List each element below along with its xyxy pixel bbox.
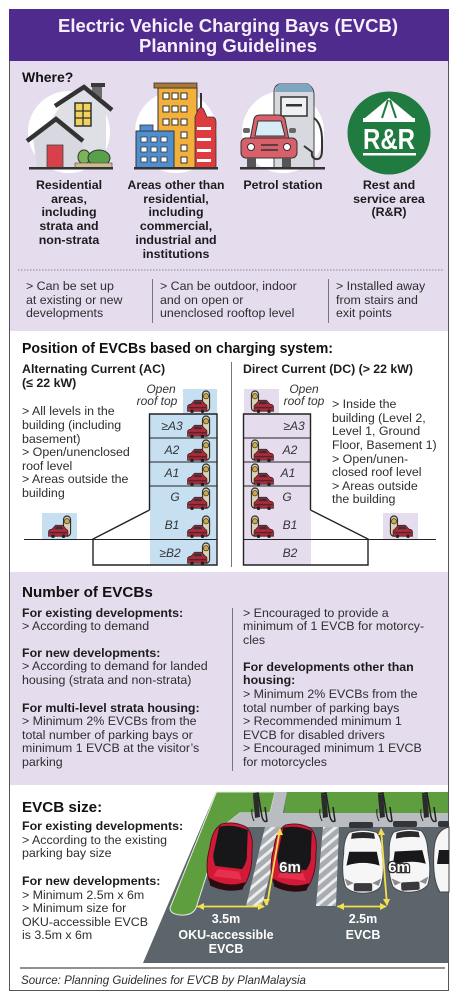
- title: [9, 9, 449, 61]
- text: left column: total number of parking bays or: [22, 728, 193, 742]
- icon: white car two: [387, 828, 431, 893]
- text: AC description: building: [22, 486, 65, 500]
- text: EVCB size notes: > Minimum 2.5m x 6m: [22, 888, 144, 902]
- text: AC description: basement): [22, 432, 81, 446]
- label: OKU-accessible size: 3.5m: [212, 912, 240, 926]
- text: AC description: > All levels in the: [22, 404, 115, 418]
- text: left column: minimum 1 EVCB at the visitor’s: [22, 741, 199, 755]
- icon: petrol station: [240, 84, 325, 173]
- heading: number of EVCBs: Number of EVCBs: [22, 584, 153, 601]
- diagram: AC building: B1: [165, 518, 179, 532]
- text: EVCB size notes: OKU-accessible EVCB: [22, 915, 148, 929]
- label: 6m EVCB: 6m: [388, 859, 410, 876]
- diagram: DC building: A2: [282, 443, 298, 457]
- text: location labels: Residential: [36, 178, 102, 192]
- text: DC description: > Inside the: [332, 397, 397, 411]
- text: DC description: [332, 397, 437, 506]
- diagram: AC building: G: [170, 490, 180, 504]
- text: left column: [22, 606, 208, 769]
- text: location labels: (R&R): [371, 205, 407, 219]
- text: location notes: [26, 279, 426, 320]
- diagram: DC building: ≥A3: [283, 419, 305, 433]
- heading: EVCB size: EVCB size:: [22, 799, 102, 816]
- text: location notes: developments: [26, 306, 103, 320]
- text: DC description: building (Level 2,: [332, 411, 426, 425]
- diagram: AC building: ≥B2: [159, 546, 181, 560]
- text: location labels: including: [41, 205, 97, 219]
- text: left column: For existing developments:: [22, 606, 183, 620]
- text: right column: For developments other than: [243, 660, 414, 674]
- heading: where: Where?: [22, 69, 73, 85]
- text: left column: > Minimum 2% EVCBs from the: [22, 714, 197, 728]
- diagram: AC building: ≥A3: [161, 419, 183, 433]
- text: right column: > Encouraged to provide a: [243, 606, 389, 620]
- diagram: DC building: B2: [283, 546, 298, 560]
- text: location notes: and on open or: [160, 293, 243, 307]
- illustration: parking bays: [143, 792, 449, 963]
- text: DC description: > Areas outside: [332, 479, 418, 493]
- text: left column: parking: [22, 755, 63, 769]
- text: DC description: > Open/unen-: [332, 452, 408, 466]
- text: open roof top: roof top: [137, 394, 178, 408]
- diagram: DC building: [243, 389, 436, 565]
- label: EVCB size: EVCB: [346, 928, 380, 942]
- text: open roof top DC: roof top: [284, 394, 325, 408]
- subheading: AC power: (≤ 22 kW): [22, 376, 76, 390]
- text: right column: total number of parking bays: [243, 701, 399, 715]
- panel: direct current: [243, 362, 437, 565]
- text: EVCB size notes: > According to the existing: [22, 833, 167, 847]
- text: location notes: > Installed away: [336, 279, 426, 293]
- title: Planning Guidelines: [139, 36, 317, 56]
- subheading: AC: Alternating Current (AC): [22, 362, 165, 376]
- panel: number of EVCBs: [10, 572, 448, 785]
- text: EVCB size notes: is 3.5m x 6m: [22, 928, 92, 942]
- text: location notes: at existing or new: [26, 293, 122, 307]
- label: EVCB size: 2.5m: [349, 912, 377, 926]
- text: location labels: Petrol station: [243, 178, 323, 192]
- text: location notes: exit points: [336, 306, 392, 320]
- text: location labels: areas,: [51, 192, 87, 206]
- icon: residential house: [27, 83, 113, 173]
- text: left column: > According to demand for landed: [22, 659, 208, 673]
- text: left column: For new developments:: [22, 646, 160, 660]
- icon: red car right: [268, 821, 320, 894]
- text: right column: > Minimum 2% EVCBs from the: [243, 687, 418, 701]
- text: right column: cles: [243, 633, 265, 647]
- arrows: dimensions: [197, 828, 390, 910]
- diagram: DC building: B1: [283, 518, 297, 532]
- text: right column: housing:: [243, 673, 295, 687]
- diagram: AC building: A2: [164, 443, 180, 457]
- text: open roof top DC: [284, 382, 325, 408]
- label: OKU-accessible size: EVCB: [209, 942, 243, 956]
- text: DC description: closed roof level: [332, 465, 422, 479]
- text: location notes: > Can be outdoor, indoor: [160, 279, 297, 293]
- text: left column: housing (strata and non-strata): [22, 673, 191, 687]
- text: EVCB size notes: For existing developments:: [22, 819, 183, 833]
- text: right column: EVCB for disabled drivers: [243, 728, 385, 742]
- text: location labels: [36, 178, 425, 261]
- icon: white car three: [434, 827, 449, 892]
- diagram: AC building: A1: [164, 466, 179, 480]
- text: DC description: the building: [332, 492, 395, 506]
- text: location labels: commercial,: [140, 219, 212, 233]
- icon: rest and service area: R&R: [363, 124, 415, 156]
- diagram: DC building: A1: [280, 466, 295, 480]
- icon: red car left: [204, 820, 256, 893]
- text: left column: > According to demand: [22, 619, 149, 633]
- text: location labels: Rest and: [363, 178, 415, 192]
- subheading: DC: Direct Current (DC) (> 22 kW): [243, 362, 413, 376]
- icon: commercial buildings: [134, 83, 218, 173]
- label: OKU-accessible size: OKU-accessible: [178, 928, 274, 942]
- diagram: DC building: G: [282, 490, 292, 504]
- text: location labels: residential,: [143, 192, 209, 206]
- text: DC description: Level 1, Ground: [332, 424, 420, 438]
- text: location labels: industrial and: [135, 233, 217, 247]
- text: DC description: Floor, Basement 1): [332, 438, 437, 452]
- panel: alternating current: [22, 362, 217, 565]
- text: open roof top: [137, 382, 178, 408]
- text: left column: For multi-level strata housing:: [22, 701, 200, 715]
- text: location labels: institutions: [143, 247, 209, 261]
- text: location labels: strata and: [39, 219, 99, 233]
- title: Electric Vehicle Charging Bays (EVCB): [58, 16, 398, 36]
- text: EVCB size notes: For new developments:: [22, 874, 160, 888]
- text: location labels: non-strata: [39, 233, 99, 247]
- diagram: AC building: [24, 389, 217, 565]
- text: AC description: > Areas outside the: [22, 472, 129, 486]
- text: right column: > Recommended minimum 1: [243, 714, 402, 728]
- text: AC description: > Open/unenclosed: [22, 445, 130, 459]
- text: EVCB size notes: [22, 819, 183, 942]
- text: EVCB size notes: parking bay size: [22, 846, 112, 860]
- label: OKU-accessible size: [178, 912, 274, 956]
- text: location notes: unenclosed rooftop level: [160, 306, 294, 320]
- text: AC description: [22, 404, 130, 500]
- icon: white car one: [343, 830, 383, 893]
- text: location labels: service area: [353, 192, 425, 206]
- text: source: Source: Planning Guidelines for EVCB by PlanMalaysia: [21, 973, 306, 987]
- text: right column: > Encouraged minimum 1 EVCB: [243, 741, 422, 755]
- heading: position: Position of EVCBs based on charging system:: [22, 340, 333, 357]
- label: 6m OKU: 6m: [279, 859, 301, 876]
- text: location notes: > Can be set up: [26, 279, 114, 293]
- label: EVCB size: [346, 912, 380, 942]
- panel: where: [10, 61, 448, 331]
- text: AC description: building (including: [22, 418, 121, 432]
- text: right column: [243, 606, 424, 769]
- text: EVCB size notes: > Minimum size for: [22, 901, 126, 915]
- icon: rest and service area: [348, 92, 430, 174]
- text: location notes: from stairs and: [336, 293, 418, 307]
- text: right column: for motorcycles: [243, 755, 327, 769]
- text: open roof top DC: Open: [289, 382, 319, 396]
- text: AC description: roof level: [22, 459, 72, 473]
- text: location labels: including: [148, 205, 204, 219]
- text: open roof top: Open: [146, 382, 176, 396]
- text: right column: minimum of 1 EVCB for motorcy-: [243, 619, 424, 633]
- text: location labels: Areas other than: [128, 178, 224, 192]
